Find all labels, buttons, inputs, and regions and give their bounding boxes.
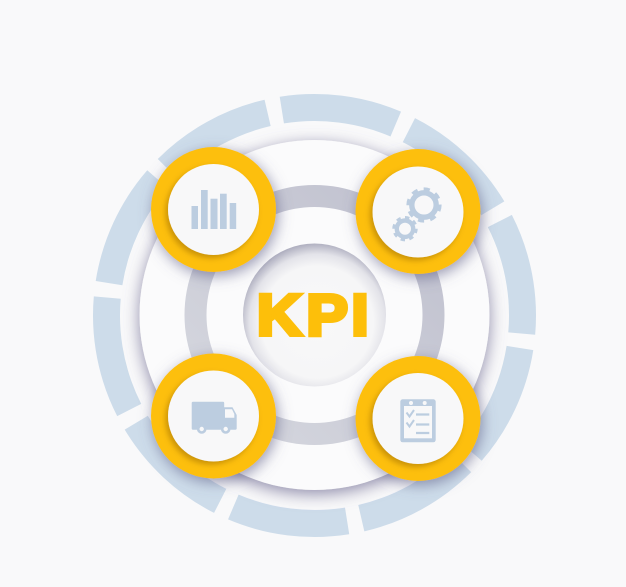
icon: truck: [192, 402, 237, 434]
yellow ring: [356, 356, 480, 481]
white circle: [372, 373, 464, 464]
node: truck: [151, 354, 276, 478]
KPI title: P: [306, 282, 348, 347]
yellow ring: [151, 147, 276, 272]
gray middle ring: [196, 196, 434, 434]
KPI title: I: [351, 282, 369, 347]
KPI title: K: [257, 282, 302, 347]
white circle: [168, 370, 259, 462]
yellow ring: [151, 354, 276, 478]
yellow ring: [356, 149, 480, 274]
node: checklist: [356, 356, 480, 481]
center disc: [243, 244, 386, 386]
node: gears: [356, 149, 480, 274]
icon: bar chart: [192, 190, 236, 229]
node: bar chart: [151, 147, 276, 272]
icon: clipboard checklist: [400, 399, 436, 442]
white circle: [168, 164, 259, 255]
outer segmented ring: [77, 78, 552, 553]
icon: gears: [394, 189, 440, 240]
white circle: [372, 166, 464, 258]
white disc: [140, 140, 490, 490]
